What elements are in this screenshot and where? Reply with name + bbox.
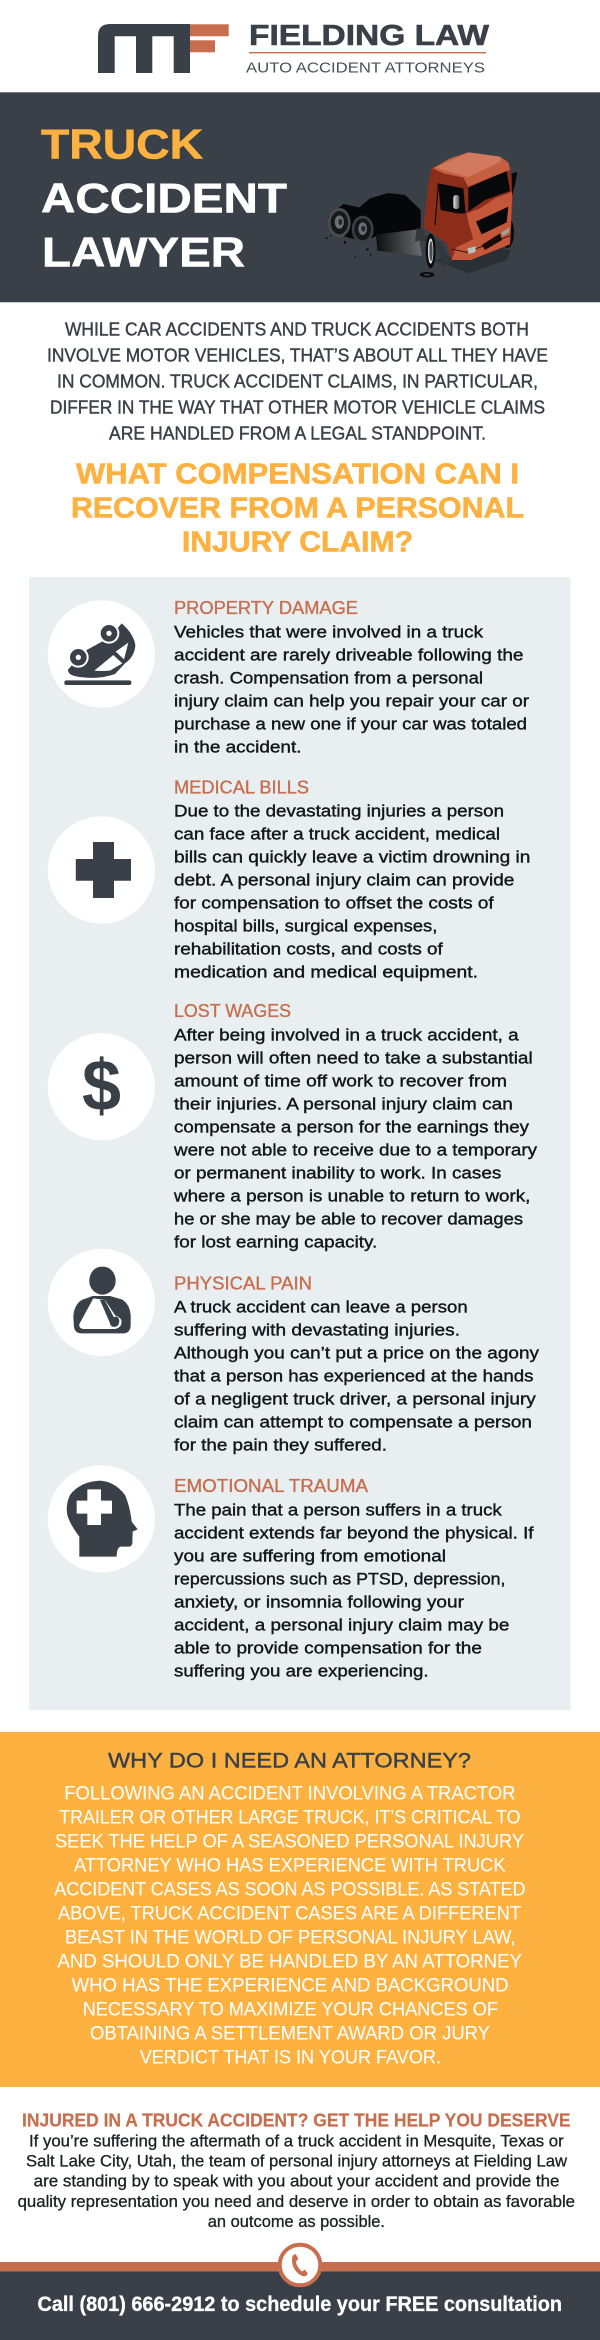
item text: repercussions such as PTSD, depression, [174, 1569, 506, 1588]
attorney text: NECESSARY TO MAXIMIZE YOUR CHANCES OF [83, 1998, 498, 2020]
item text: A truck accident can leave a person [174, 1297, 468, 1316]
icon: MF monogram [98, 24, 229, 73]
closing text: are standing by to speak with you about your accident and provide the [34, 2173, 559, 2191]
item text: purchase a new one if your car was totaled [174, 714, 527, 733]
item text: MEDICAL BILLS [174, 777, 309, 797]
icon: dollar sign: $ [82, 1046, 121, 1126]
title: ACCIDENT [41, 175, 287, 222]
attorney text: ACCIDENT CASES AS SOON AS POSSIBLE. AS STATED [54, 1878, 526, 1900]
attorney text: ABOVE, TRUCK ACCIDENT CASES ARE A DIFFERENT [58, 1902, 521, 1924]
attorney text: BEAST IN THE WORLD OF PERSONAL INJURY LAW, [65, 1926, 516, 1948]
closing text [18, 2132, 575, 2231]
item text: in the accident. [174, 737, 302, 756]
call to action text: Call (801) 666-2912 to schedule your FREE consultation [38, 2293, 562, 2316]
panel: why an attorney [0, 1732, 600, 2087]
item text: EMOTIONAL TRAUMA [174, 1476, 368, 1496]
icon: phone [280, 2245, 320, 2285]
item text [174, 1476, 534, 1680]
item: lost wages [48, 1001, 538, 1251]
item text: rehabilitation costs, and costs of [174, 939, 443, 958]
item text: where a person is unable to return to work, [173, 1186, 530, 1205]
item text: accident, a personal injury claim may be [174, 1615, 509, 1634]
item text: their injuries. A personal injury claim can [174, 1094, 513, 1113]
heading: what compensation: WHAT COMPENSATION CAN I [76, 458, 519, 490]
item text: injury claim can help you repair your car or [174, 691, 529, 710]
item text: medication and medical equipment. [174, 962, 478, 981]
item: property damage [48, 598, 529, 756]
heading: what compensation [71, 458, 524, 558]
debris [326, 235, 371, 257]
panel: call to action footer [0, 2245, 600, 2340]
item text: After being involved in a truck accident, a [174, 1025, 519, 1044]
item text: crash. Compensation from a personal [174, 668, 483, 687]
item text: PHYSICAL PAIN [174, 1273, 312, 1293]
item text: he or she may be able to recover damages [174, 1209, 523, 1228]
icon: person with sling [48, 1249, 155, 1356]
item text: anxiety, or insomnia following your [174, 1592, 464, 1611]
item text: for the pain they suffered. [174, 1435, 387, 1454]
icon: medical cross [48, 816, 155, 924]
item text: LOST WAGES [174, 1001, 291, 1021]
item text: compensate a person for the earnings they [174, 1117, 530, 1136]
heading: why do I need an attorney: WHY DO I NEED AN ATTORNEY? [108, 1750, 471, 1772]
heading: what compensation: INJURY CLAIM? [182, 526, 413, 558]
intro text: DIFFER IN THE WAY THAT OTHER MOTOR VEHICLE CLAIMS [50, 397, 545, 417]
item text: Vehicles that were involved in a truck [174, 622, 484, 641]
item: physical pain [48, 1249, 540, 1454]
intro text: INVOLVE MOTOR VEHICLES, THAT’S ABOUT ALL THEY HAVE [47, 345, 548, 365]
attorney text: SEEK THE HELP OF A SEASONED PERSONAL INJURY [55, 1830, 524, 1852]
item text: bills can quickly leave a victim drowning in [174, 847, 530, 866]
attorney text: ATTORNEY WHO HAS EXPERIENCE WITH TRUCK [74, 1854, 506, 1876]
item text: were not able to receive due to a temporary [173, 1140, 538, 1159]
attorney text: FOLLOWING AN ACCIDENT INVOLVING A TRACTOR [64, 1782, 516, 1804]
item text: can face after a truck accident, medical [174, 824, 500, 843]
item text: claim can attempt to compensate a person [174, 1412, 532, 1431]
item text: accident extends far beyond the physical. If [174, 1523, 534, 1542]
closing text: an outcome as possible. [208, 2213, 385, 2231]
item text: for lost earning capacity. [174, 1232, 377, 1251]
closing text: quality representation you need and deserve in order to obtain as favorable [18, 2193, 575, 2211]
item text: person will often need to take a substantial [174, 1048, 533, 1067]
item text [174, 777, 530, 981]
item: medical bills [48, 777, 530, 981]
firm name: FIELDING LAW [249, 20, 490, 52]
heading: get the help you deserve: INJURED IN A TRUCK ACCIDENT? GET THE HELP YOU DESERVE [22, 2110, 571, 2130]
intro text: IN COMMON. TRUCK ACCIDENT CLAIMS, IN PARTICULAR, [57, 371, 538, 391]
closing text: If you’re suffering the aftermath of a truck accident in Mesquite, Texas or [29, 2132, 564, 2150]
panel: compensation types [29, 577, 571, 1710]
item text: you are suffering from emotional [174, 1546, 446, 1565]
item text [174, 598, 529, 756]
item text: able to provide compensation for the [174, 1638, 482, 1657]
attorney text [54, 1782, 526, 2068]
attorney text: VERDICT THAT IS IN YOUR FAVOR. [140, 2046, 441, 2068]
item text: suffering you are experiencing. [174, 1661, 429, 1680]
item text [174, 1273, 540, 1454]
icon: crashed truck [326, 152, 517, 277]
item text: PROPERTY DAMAGE [174, 598, 358, 618]
item text: accident are rarely driveable following the [174, 645, 524, 664]
logo: Fielding Law [98, 20, 490, 77]
item text: suffering with devastating injuries. [174, 1320, 460, 1339]
item text: hospital bills, surgical expenses, [174, 916, 437, 935]
intro text [47, 319, 548, 443]
item: emotional trauma [48, 1465, 534, 1680]
closing text: Salt Lake City, Utah, the team of personal injury attorneys at Fielding Law [26, 2152, 567, 2170]
item text: Due to the devastating injuries a person [174, 801, 504, 820]
icon: dollar sign [48, 1033, 155, 1140]
title [41, 121, 287, 276]
item text: or permanent inability to work. In cases [174, 1163, 501, 1182]
title: TRUCK [41, 121, 203, 168]
firm tagline: AUTO ACCIDENT ATTORNEYS [246, 61, 485, 77]
icon: overturned car [48, 600, 155, 708]
item text: Although you can’t put a price on the agony [174, 1343, 540, 1362]
heading: what compensation: RECOVER FROM A PERSONAL [71, 492, 524, 524]
item text: that a person has experienced at the hands [174, 1366, 534, 1385]
intro text: ARE HANDLED FROM A LEGAL STANDPOINT. [109, 423, 486, 443]
title: LAWYER [42, 229, 245, 276]
attorney text: WHO HAS THE EXPERIENCE AND BACKGROUND [72, 1974, 509, 1996]
item text: for compensation to offset the costs of [174, 893, 494, 912]
item text: of a negligent truck driver, a personal injury [174, 1389, 536, 1408]
attorney text: AND SHOULD ONLY BE HANDLED BY AN ATTORNEY [57, 1950, 522, 1972]
item text: debt. A personal injury claim can provide [174, 870, 514, 889]
attorney text: OBTAINING A SETTLEMENT AWARD OR JURY [90, 2022, 490, 2044]
item text: amount of time off work to recover from [174, 1071, 507, 1090]
intro text: WHILE CAR ACCIDENTS AND TRUCK ACCIDENTS BOTH [65, 319, 529, 339]
panel: title banner [0, 92, 600, 302]
item text: The pain that a person suffers in a truck [174, 1500, 502, 1519]
attorney text: TRAILER OR OTHER LARGE TRUCK, IT’S CRITICAL TO [59, 1806, 521, 1828]
item text [173, 1001, 538, 1251]
icon: head with cross [48, 1465, 155, 1572]
